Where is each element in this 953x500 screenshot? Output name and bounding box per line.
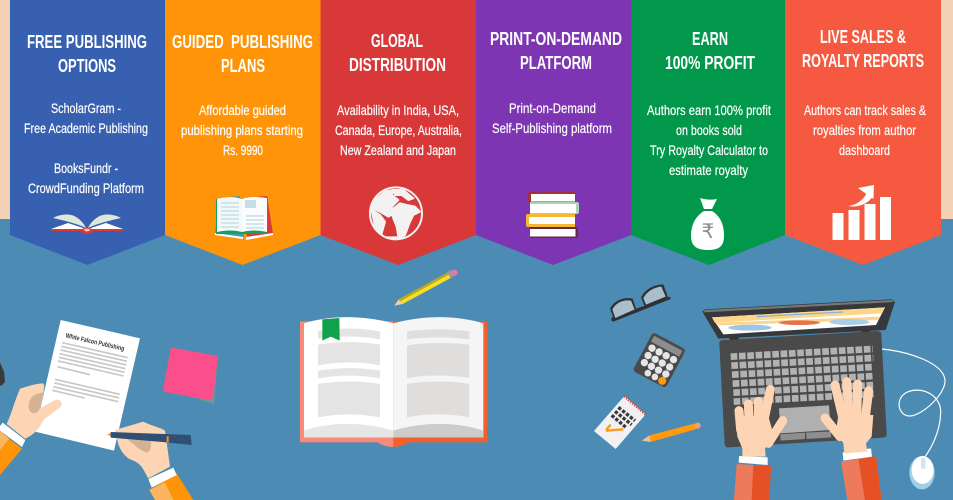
text: free publishing description: Free Academic Publishing	[24, 120, 148, 136]
heading: print-on-demand platform: PLATFORM	[520, 52, 592, 73]
book cover	[300, 321, 487, 447]
heading: guided publishing plans: GUIDED PUBLISHING	[172, 31, 313, 52]
text: print-on-demand description: Self-Publishing platform	[492, 120, 612, 136]
illustration: open book with pencil	[300, 270, 487, 447]
icon: open book with flying pages	[51, 214, 123, 234]
document: White Falcon Publishing	[65, 332, 125, 353]
panel: live sales and royalty reports	[785, 0, 941, 265]
text: guided plans description: Affordable guided	[199, 102, 286, 118]
panel: global distribution	[320, 0, 476, 265]
text: profit description: Authors earn 100% profit	[647, 102, 771, 118]
icon: globe	[370, 187, 422, 239]
heading: live sales and royalty reports: LIVE SALES &	[820, 26, 906, 47]
text: guided plans description: publishing plans starting	[181, 122, 303, 138]
icon: rising bar chart with arrow	[832, 185, 891, 240]
heading: global distribution: DISTRIBUTION	[349, 54, 446, 75]
calculator	[633, 332, 686, 388]
text: distribution description: New Zealand and Japan	[340, 142, 456, 158]
mouse cable	[882, 349, 945, 457]
text: distribution description: Canada, Europe, Australia,	[335, 122, 462, 138]
document	[35, 320, 140, 451]
keyboard	[731, 349, 875, 402]
book pages	[304, 317, 483, 437]
right hand with pen	[107, 422, 193, 500]
item cut off at left edge	[0, 363, 5, 386]
text: print-on-demand description: Print-on-Demand	[509, 100, 596, 116]
typing hand: right	[825, 382, 882, 500]
heading: guided publishing plans: PLANS	[221, 55, 265, 76]
orange pencil	[642, 423, 701, 442]
illustration: desk items and laptop	[594, 284, 945, 500]
heading: global distribution	[349, 30, 446, 75]
pencil	[394, 270, 458, 306]
text: free publishing description: ScholarGram -	[51, 100, 121, 116]
text: guided plans description: Rs. 9990	[223, 142, 263, 158]
heading: earn 100% profit	[665, 28, 756, 73]
text: free publishing description: CrowdFunding Platform	[28, 180, 144, 196]
text: distribution description	[335, 102, 462, 158]
left hand holding document	[0, 383, 62, 475]
icon: open book with covers	[215, 196, 273, 240]
heading: print-on-demand platform: PRINT-ON-DEMAND	[490, 28, 622, 49]
bookmark	[322, 318, 340, 341]
panel: earn 100% profit	[631, 0, 785, 265]
heading: earn 100% profit: EARN	[692, 28, 728, 49]
glasses	[610, 284, 671, 322]
text: sales reports description: royalties from author	[813, 122, 916, 138]
mouse	[909, 456, 935, 489]
text: profit description	[647, 102, 771, 178]
text: free publishing description: BooksFundr -	[54, 160, 118, 176]
text: sales reports description	[804, 102, 926, 158]
heading: earn 100% profit: 100% PROFIT	[665, 52, 756, 73]
heading: live sales and royalty reports	[802, 26, 924, 71]
icon: stack of books	[526, 192, 579, 238]
panel: free publishing options	[10, 0, 165, 265]
text: distribution description: Availability in India, USA,	[337, 102, 459, 118]
laptop	[702, 299, 895, 447]
text: print-on-demand description	[492, 100, 612, 136]
notepad	[594, 396, 646, 449]
heading: free publishing options: FREE PUBLISHING	[27, 31, 147, 52]
typing hand: left	[734, 389, 783, 500]
text: profit description: estimate royalty	[669, 162, 748, 178]
sticky note	[163, 347, 218, 404]
illustration: hands signing a document	[0, 320, 218, 500]
touchpad	[779, 405, 831, 441]
text: sales reports description: dashboard	[839, 142, 890, 158]
heading: global distribution: GLOBAL	[371, 30, 423, 51]
text: free publishing description	[24, 100, 148, 196]
heading: guided publishing plans	[172, 31, 313, 76]
text: profit description: Try Royalty Calculator to	[650, 142, 768, 158]
icon: money bag with rupee	[691, 198, 724, 250]
text: guided plans description	[181, 102, 303, 158]
icon: money bag with rupee: ₹	[702, 219, 714, 243]
heading: free publishing options: OPTIONS	[58, 55, 116, 76]
panel: guided publishing plans	[165, 0, 320, 265]
panel: print-on-demand platform	[476, 0, 631, 265]
heading: free publishing options	[27, 31, 147, 76]
heading: print-on-demand platform	[490, 28, 622, 73]
text: profit description: on books sold	[676, 122, 742, 138]
